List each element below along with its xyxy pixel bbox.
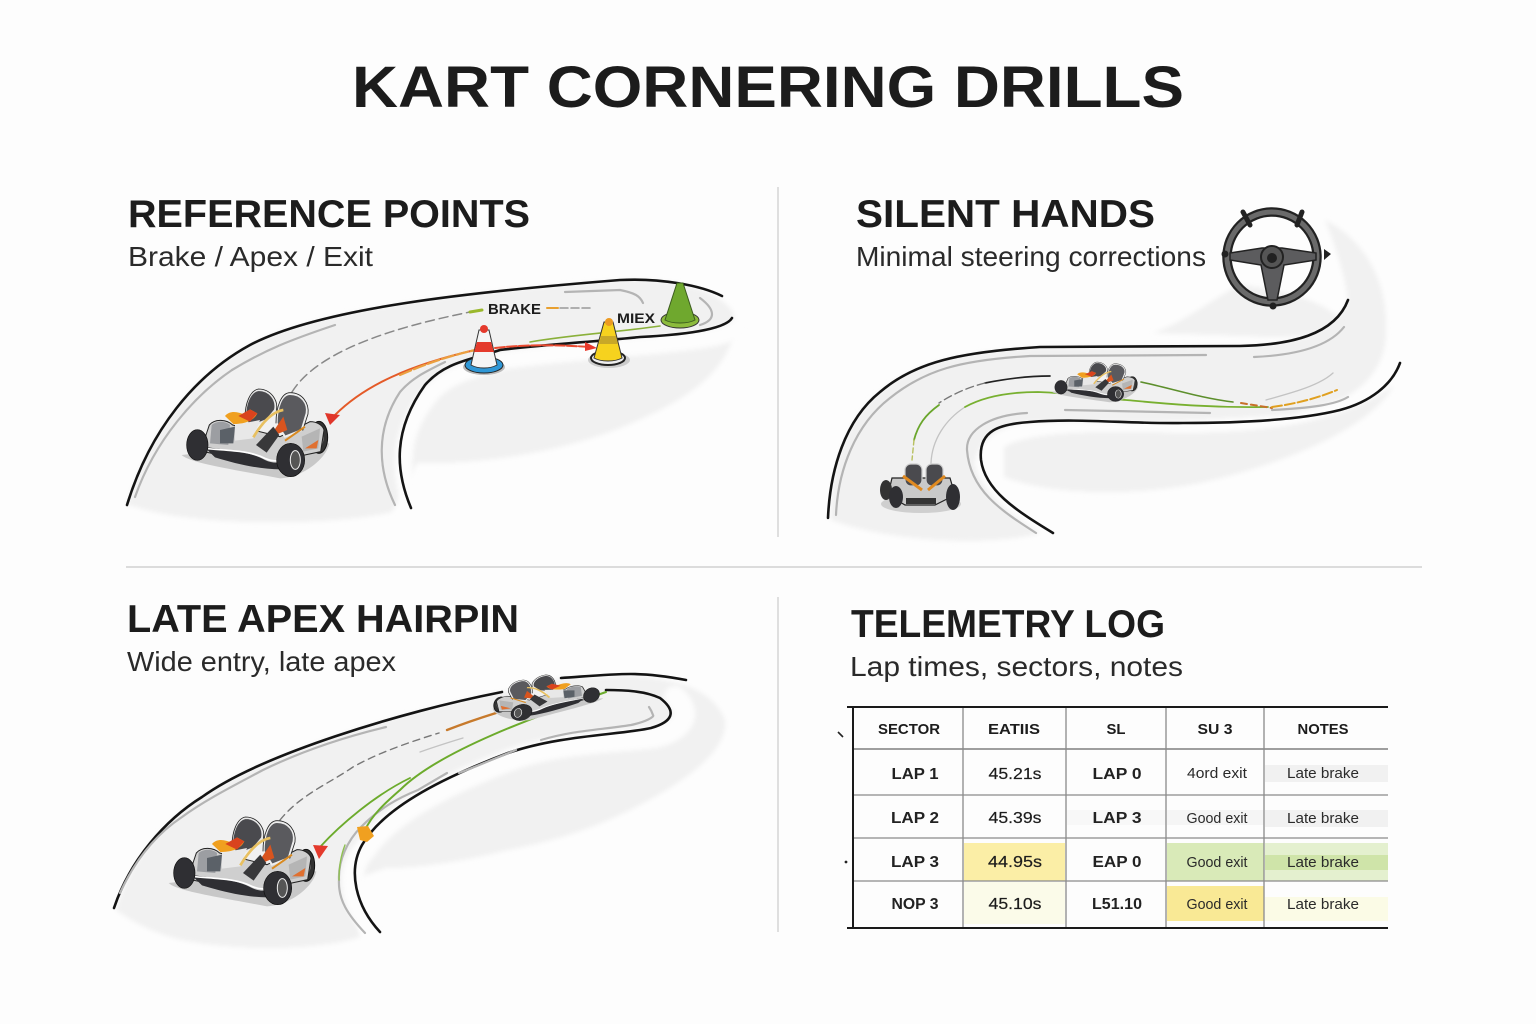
- label: brake: BRAKE: [488, 301, 541, 318]
- icon: yellow cone: [588, 318, 630, 368]
- subheading: lap times sectors notes: Lap times, sectors, notes: [850, 651, 1183, 682]
- table header row: NOTES: [1298, 721, 1348, 738]
- panel: late apex hairpin: [114, 598, 725, 948]
- table row: nop 3: Good exit: [1186, 897, 1248, 913]
- icon: kart: [182, 389, 329, 478]
- table row: lap 1: LAP 1: [892, 766, 939, 783]
- table row: lap 2: LAP 2: [891, 810, 939, 827]
- table row: lap 1: 45.21s: [988, 766, 1042, 783]
- subheading: brake apex exit: Brake / Apex / Exit: [128, 241, 373, 272]
- table row: lap 2: Late brake: [1287, 811, 1359, 827]
- track: corner with cones: [127, 280, 738, 522]
- table row: nop 3: [892, 896, 1359, 913]
- heading: silent hands: SILENT HANDS: [856, 193, 1155, 236]
- table row: lap 2: LAP 3: [1092, 810, 1142, 827]
- icon: red cone: [463, 325, 505, 375]
- title: KART CORNERING DRILLS: [352, 55, 1184, 120]
- table row: lap 2: [891, 810, 1359, 827]
- table header row: SU 3: [1198, 721, 1232, 738]
- table row: nop 3: 45.10s: [988, 896, 1042, 913]
- heading: reference points: REFERENCE POINTS: [128, 193, 530, 236]
- track: hairpin: [114, 674, 725, 948]
- track: s-curve: [828, 220, 1400, 541]
- panel: telemetry log: [838, 603, 1388, 928]
- table row: lap 3: [891, 854, 1359, 871]
- label: apex: MIEX: [617, 310, 656, 326]
- panel: silent hands: [828, 193, 1400, 541]
- subheading: minimal steering corrections: Minimal steering corrections: [856, 241, 1206, 272]
- icon: kart exiting: [492, 667, 603, 725]
- table header row: EATIIS: [988, 721, 1040, 738]
- icon: kart mid-corner: [1052, 362, 1138, 402]
- racing lines and arrows: [292, 308, 660, 425]
- panel: reference points: [127, 193, 738, 522]
- heading: late apex hairpin: LATE APEX HAIRPIN: [127, 598, 519, 641]
- icon: kart foreground: [169, 817, 316, 906]
- racing lines and arrows: [280, 692, 606, 880]
- table row: lap 1: 4ord exit: [1187, 766, 1247, 782]
- table header row: SECTOR: [878, 721, 940, 738]
- table row: nop 3: L51.10: [1092, 896, 1142, 913]
- subheading: wide entry late apex: Wide entry, late apex: [127, 646, 396, 677]
- table row: lap 3: LAP 3: [891, 854, 939, 871]
- icon: steering wheel: [1222, 212, 1331, 310]
- icon: green cone: [661, 283, 699, 328]
- icon: kart rear view: [880, 464, 961, 513]
- table row: lap 2: Good exit: [1186, 811, 1248, 827]
- table row: lap 1: LAP 0: [1092, 766, 1142, 783]
- table header row: SL: [1106, 721, 1126, 738]
- table: telemetry: [838, 707, 1388, 928]
- table row: lap 1: [892, 766, 1359, 783]
- table row: lap 3: Good exit: [1186, 855, 1248, 871]
- heading: telemetry log: TELEMETRY LOG: [851, 603, 1165, 646]
- table row: lap 2: 45.39s: [988, 810, 1042, 827]
- table row: lap 3: EAP 0: [1092, 854, 1142, 871]
- table row: lap 3: Late brake: [1287, 855, 1359, 871]
- table row: nop 3: NOP 3: [892, 896, 939, 913]
- table row: lap 1: Late brake: [1287, 766, 1359, 782]
- table row: lap 3: 44.95s: [988, 854, 1042, 871]
- table header row: [878, 721, 1348, 738]
- racing lines: [912, 373, 1337, 463]
- table row: nop 3: Late brake: [1287, 897, 1359, 913]
